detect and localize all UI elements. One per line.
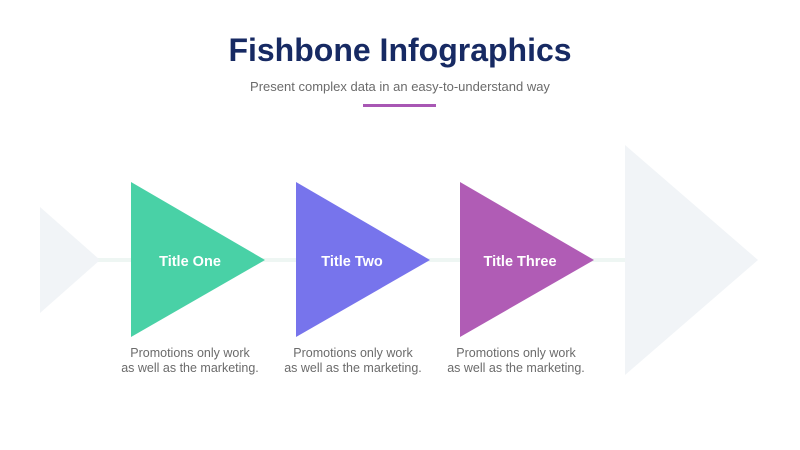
- triangle: title one: [131, 182, 265, 337]
- text: one: Promotions only work: [130, 346, 250, 360]
- fish head: [625, 145, 758, 375]
- title: Fishbone Infographics: [228, 32, 572, 68]
- triangle: title two: Title Two: [321, 254, 383, 270]
- text: three: Promotions only work: [456, 346, 576, 360]
- text: one: as well as the marketing.: [121, 361, 259, 375]
- text: two: Promotions only work: [293, 346, 413, 360]
- triangle: title three: [460, 182, 594, 337]
- text: three: [447, 346, 585, 375]
- spine line: [95, 258, 630, 262]
- text: two: as well as the marketing.: [284, 361, 422, 375]
- triangle: title three: Title Three: [483, 254, 557, 270]
- text: two: [284, 346, 422, 375]
- fish tail: [40, 207, 100, 313]
- triangle: title one: Title One: [159, 254, 221, 270]
- underline accent: [363, 104, 436, 107]
- text: three: as well as the marketing.: [447, 361, 585, 375]
- subtitle: Present complex data in an easy-to-understand way: [250, 79, 550, 94]
- text: one: [121, 346, 259, 375]
- triangle: title two: [296, 182, 430, 337]
